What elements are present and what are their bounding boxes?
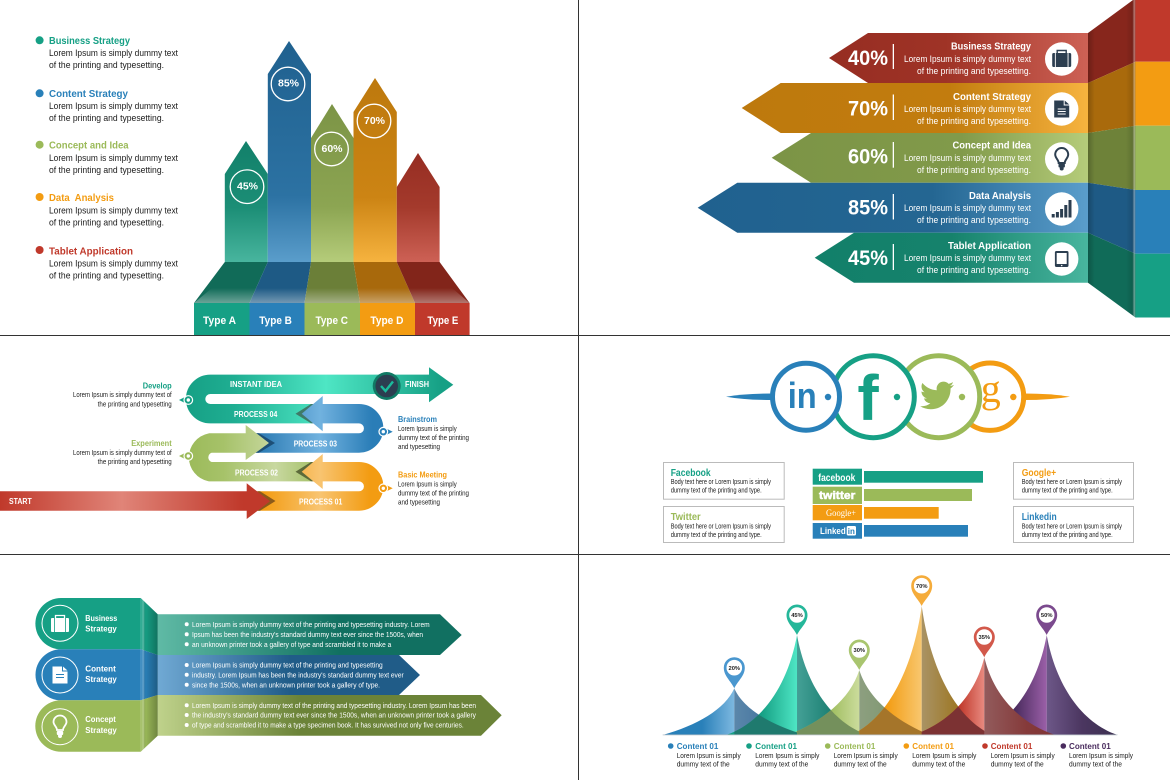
text: Experiment: the printing and typesetting [98,457,172,466]
ribbon: content: Lorem Ipsum is simply dummy text of the printing and typesetting [192,661,383,670]
stage labels: INSTANT IDEA [230,380,282,389]
legend: teal: Lorem Ipsum is simply [755,751,820,760]
panel: arrow bars on stage [36,35,470,335]
ribbon: Content Strategy: 70% [848,98,888,120]
legend: blue: dummy text of the [677,760,730,769]
tab: Concept Strategy: Strategy [85,726,117,735]
icon: tablet [1045,242,1078,276]
circle: google: g [981,366,1001,411]
box: Google+: Google+ [1022,468,1056,479]
text: Basic Meeting: Basic Meeting [398,469,447,479]
percentage badges: 70% [364,115,386,127]
pin: 50%: 50% [1041,613,1053,619]
legend: purple: Lorem Ipsum is simply [1069,751,1133,760]
circle: facebook: f [857,362,879,434]
box: Twitter: Body text here or Lorem Ipsum is simply [671,522,771,530]
circle: google [956,363,1024,430]
bar chart: Linked [820,526,846,536]
type labels: Type C [316,315,348,327]
ribbon: Concept and Idea: of the printing and typesetting. [917,165,1031,175]
arrow: blue head [296,396,323,431]
tab: Content Strategy: Strategy [85,675,117,684]
flow: green [199,443,312,472]
legend: blue: Content 01 [677,741,719,751]
flow: orange [258,472,374,501]
panel: social media [664,356,1134,542]
ribbon: Tablet Application: Lorem Ipsum is simply dummy text [904,253,1031,263]
legend list: Tablet Application [49,245,133,257]
box: Twitter: Twitter [671,512,701,523]
overlap: orange and red [922,706,984,734]
legend list: of the printing and typesetting. [49,165,164,175]
tab: Concept Strategy: Concept [85,715,116,724]
ribbon: Content Strategy: Lorem Ipsum is simply dummy text [904,104,1031,114]
legend list: Lorem Ipsum is simply dummy text [49,153,178,163]
bar chart: twitter [819,490,856,502]
flow: teal [196,367,453,414]
pin: 45% [786,604,808,635]
box: Linkedin [1014,506,1134,542]
tab: Business Strategy [35,598,141,649]
ribbon: Business Strategy [829,33,1088,83]
circle: linkedin: in [788,375,817,416]
legend: orange: Lorem Ipsum is simply [912,751,977,760]
text: Develop [73,380,172,408]
box: Linkedin: Linkedin [1022,512,1057,523]
tab: Content Strategy: Content [85,664,116,673]
legend: red: Content 01 [991,741,1033,751]
stage labels: PROCESS 04 [234,410,278,419]
legend list: Lorem Ipsum is simply dummy text [49,48,178,58]
legend list: Content Strategy [49,88,128,100]
bar chart: in [848,527,855,536]
text: Brainstrom: Brainstrom [398,414,437,424]
arrow: start [0,483,276,519]
pin: 45%: 45% [791,613,803,619]
wall colour strips [1136,0,1170,318]
type labels: Type D [370,315,403,327]
panel: peak chart [663,575,1133,769]
legend: green: dummy text of the [834,760,887,769]
ribbon: Concept and Idea: Concept and Idea [952,140,1031,152]
text: Basic Meeting: dummy text of the printing [398,488,469,498]
stage labels: PROCESS 03 [294,439,337,448]
text: Brainstrom: dummy text of the printing [398,433,469,442]
legend list: of the printing and typesetting. [49,217,164,227]
bar chart [813,469,983,539]
stage labels: PROCESS 01 [299,497,343,506]
legend: green [825,741,898,769]
box: Linkedin: Body text here or Lorem Ipsum is simply [1022,522,1122,530]
ribbon: Concept and Idea [772,133,1088,183]
icon: document [1045,92,1078,126]
text: Basic Meeting [398,469,469,506]
legend list: Lorem Ipsum is simply dummy text [49,258,178,268]
flow: blue [256,414,374,443]
tab: Business Strategy: Strategy [85,625,117,634]
box: Twitter [664,506,784,542]
panel: folded ribbons [698,0,1170,318]
peak: red 35% [913,657,1055,735]
legend list: Business Strategy [49,35,130,47]
text: Experiment: Lorem Ipsum is simply dummy text of [73,448,172,457]
ribbon: Tablet Application: Tablet Application [948,241,1031,252]
pin: 35%: 35% [978,635,990,641]
arrow: orange head [296,454,323,489]
type labels: Type E [427,315,458,327]
ribbon: content: industry. Lorem Ipsum has been the industry's standard dummy text ever [192,670,404,679]
pin: 35% [974,626,995,657]
text: Develop: the printing and typesetting [98,400,172,408]
icon: light bulb [1045,142,1078,176]
legend: purple: Content 01 [1069,741,1111,751]
box: Twitter: dummy text of the printing and type. [671,530,762,539]
tab: Business Strategy: Business [85,614,118,623]
pin: 30%: 30% [853,648,865,654]
legend: teal: Content 01 [755,741,797,751]
ribbon: business: an unknown printer took a gallery of type and scrambled it to make a [192,640,392,649]
legend list: Lorem Ipsum is simply dummy text [49,205,178,215]
overlap: blue and teal [734,714,797,734]
type labels [194,303,470,335]
ribbon: concept: the industry's standard dummy text ever since the 1500s, when an unknown printer took a gallery [192,711,476,720]
ribbon: Business Strategy: Lorem Ipsum is simply dummy text [904,54,1031,64]
circle: twitter [898,356,980,438]
legend: orange: Content 01 [912,741,954,751]
ribbon: Business Strategy: Business Strategy [951,42,1031,52]
box: Facebook: dummy text of the printing and type. [671,486,762,494]
legend: green: Content 01 [834,741,876,751]
ribbon: business [158,614,462,655]
ribbon: concept [158,695,502,736]
ribbon: Data Analysis: Lorem Ipsum is simply dummy text [904,203,1031,213]
ribbon: content [158,655,420,695]
ribbon: Concept and Idea: 60% [848,146,888,168]
ribbon: Tablet Application: 45% [848,247,888,270]
ribbon: Tablet Application [815,233,1088,283]
panel: serpentine process [0,367,469,519]
legend: orange: dummy text of the [912,760,965,769]
tab folds [141,598,158,752]
legend: purple: dummy text of the [1069,760,1122,769]
legend list: Data Analysis [49,192,114,204]
type labels: Type A [203,315,236,327]
text: Develop: Develop [143,380,172,390]
bar chart: facebook [818,472,855,484]
peak: orange 70% [851,606,993,735]
spindle right [1024,394,1070,400]
text: Basic Meeting: Lorem Ipsum is simply [398,480,457,488]
ribbon: Data Analysis: of the printing and typesetting. [917,215,1031,225]
panel: strategy tabs [35,598,502,752]
ribbon: Data Analysis: Data Analysis [969,191,1031,202]
box: Facebook [664,462,784,499]
ribbon: Data Analysis: 85% [848,197,888,220]
pin: 30% [849,640,870,670]
pin: 70%: 70% [916,584,928,590]
ribbon: Business Strategy: 40% [848,47,888,70]
type labels: Type B [259,315,292,327]
pin: 20%: 20% [728,666,740,672]
percentage badges: 60% [321,143,343,155]
arrow: green head [246,425,275,460]
box: Linkedin: dummy text of the printing and type. [1022,530,1113,539]
peak: blue 20% [663,688,806,735]
ribbon: Content Strategy [742,83,1088,133]
pin: 50% [1036,604,1057,635]
pin: 70% [911,575,932,606]
legend list: of the printing and typesetting. [49,60,164,70]
overlap: teal and green [797,710,860,734]
percentage badges: 85% [278,78,300,90]
legend: teal: dummy text of the [755,760,808,769]
ribbon: content: since the 1500s, when an unknown printer took a gallery of type. [192,680,380,689]
box: Google+ [1014,462,1134,499]
percentage badges: 45% [237,181,259,193]
stage labels: FINISH [405,380,429,389]
ribbon: business: Lorem Ipsum is simply dummy text of the printing and typesetting industry. Lorem [192,620,430,629]
ribbon: business: Ipsum has been the industry's standard dummy text ever since the 1500s, when [192,630,423,639]
circle: linkedin [772,363,840,430]
legend: teal [746,741,820,769]
legend list [36,35,178,280]
legend list: of the printing and typesetting. [49,113,164,123]
legend list: Concept and Idea [49,140,129,152]
percentage badges [230,67,391,204]
stage labels [9,380,429,506]
peak: purple 50% [976,635,1118,735]
text: Brainstrom: and typesetting [398,442,440,451]
text: Experiment: Experiment [131,438,172,448]
box: Facebook: Body text here or Lorem Ipsum is simply [671,477,771,486]
ribbon: Content Strategy: Content Strategy [953,92,1031,103]
peak: green 30% [788,670,930,735]
tab: Content Strategy [36,649,141,700]
pin: 20% [724,657,745,688]
text: Basic Meeting: and typesetting [398,498,440,506]
stage labels: START [9,497,32,506]
legend: orange [904,741,977,769]
pins [179,396,393,493]
text: Brainstrom: Lorem Ipsum is simply [398,424,457,433]
ribbon: Concept and Idea: Lorem Ipsum is simply dummy text [904,153,1031,163]
legend: green: Lorem Ipsum is simply [834,751,898,760]
legend: red: Lorem Ipsum is simply [991,751,1055,760]
legend list: Lorem Ipsum is simply dummy text [49,101,178,111]
box: Facebook: Facebook [671,468,711,479]
ribbon folds [1088,0,1136,318]
text: Develop: Lorem Ipsum is simply dummy text of [73,390,172,399]
box: Google+: Body text here or Lorem Ipsum is simply [1022,477,1122,486]
text: Experiment [73,438,172,466]
overlap: green and orange [859,707,922,734]
icon: briefcase [1045,42,1078,76]
ribbon: concept: of type and scrambled it to make a type specimen book. It has survived not only five centuries. [192,721,464,730]
arrow bars [225,41,440,262]
legend: blue [668,741,741,769]
legend: blue: Lorem Ipsum is simply [677,751,741,760]
ribbon: concept: Lorem Ipsum is simply dummy text of the printing and typesetting industry. Lorem Ipsum has been [192,701,476,710]
icon: finish check [373,372,401,400]
icon: signal bars [1045,192,1078,226]
legend: red: dummy text of the [991,760,1044,769]
legend: purple [1060,741,1133,769]
text: Brainstrom [398,414,469,451]
spindle left [726,394,772,400]
ribbon: Business Strategy: of the printing and typesetting. [917,66,1031,76]
bar chart: Google+ [826,509,856,519]
legend: red [982,741,1055,769]
legend list: of the printing and typesetting. [49,270,164,280]
stage floor [194,262,470,303]
circle: facebook [832,356,914,438]
ribbon: Content Strategy: of the printing and typesetting. [917,116,1031,126]
box: Google+: dummy text of the printing and type. [1022,486,1113,494]
ribbon: Data Analysis [698,183,1088,233]
tab: Concept Strategy [35,700,141,752]
stage labels: PROCESS 02 [235,468,278,477]
peak: teal 45% [726,635,868,735]
ribbon: Tablet Application: of the printing and typesetting. [917,265,1031,275]
